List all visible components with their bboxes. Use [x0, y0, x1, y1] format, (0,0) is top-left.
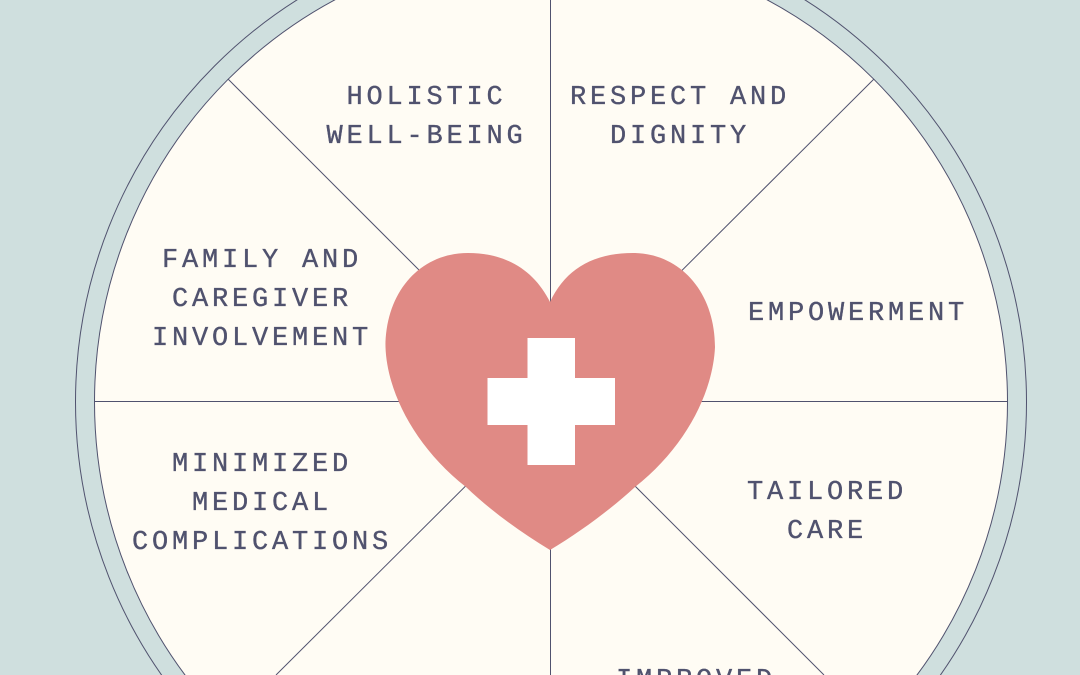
label: family and caregiver involvement: INVOLVEMENT: [152, 324, 372, 354]
label: family and caregiver involvement: CAREGIVER: [172, 285, 352, 315]
label: empowerment: EMPOWERMENT: [748, 299, 968, 329]
label: minimized medical complications: COMPLICATIONS: [132, 528, 392, 558]
label: respect and dignity: RESPECT AND: [570, 83, 790, 113]
label: holistic well-being: HOLISTIC: [346, 83, 507, 113]
label: tailored care: TAILORED: [747, 478, 907, 508]
label: minimized medical complications: MINIMIZED: [172, 450, 352, 480]
label: respect and dignity: DIGNITY: [610, 122, 750, 152]
label: minimized medical complications: MEDICAL: [192, 489, 332, 519]
label: holistic well-being: WELL-BEING: [326, 122, 527, 152]
medical cross: [488, 338, 615, 465]
label: tailored care: CARE: [787, 517, 867, 547]
label: family and caregiver involvement: FAMILY AND: [162, 246, 362, 276]
heart: [386, 253, 715, 550]
icon: heart with medical cross: [386, 253, 715, 550]
